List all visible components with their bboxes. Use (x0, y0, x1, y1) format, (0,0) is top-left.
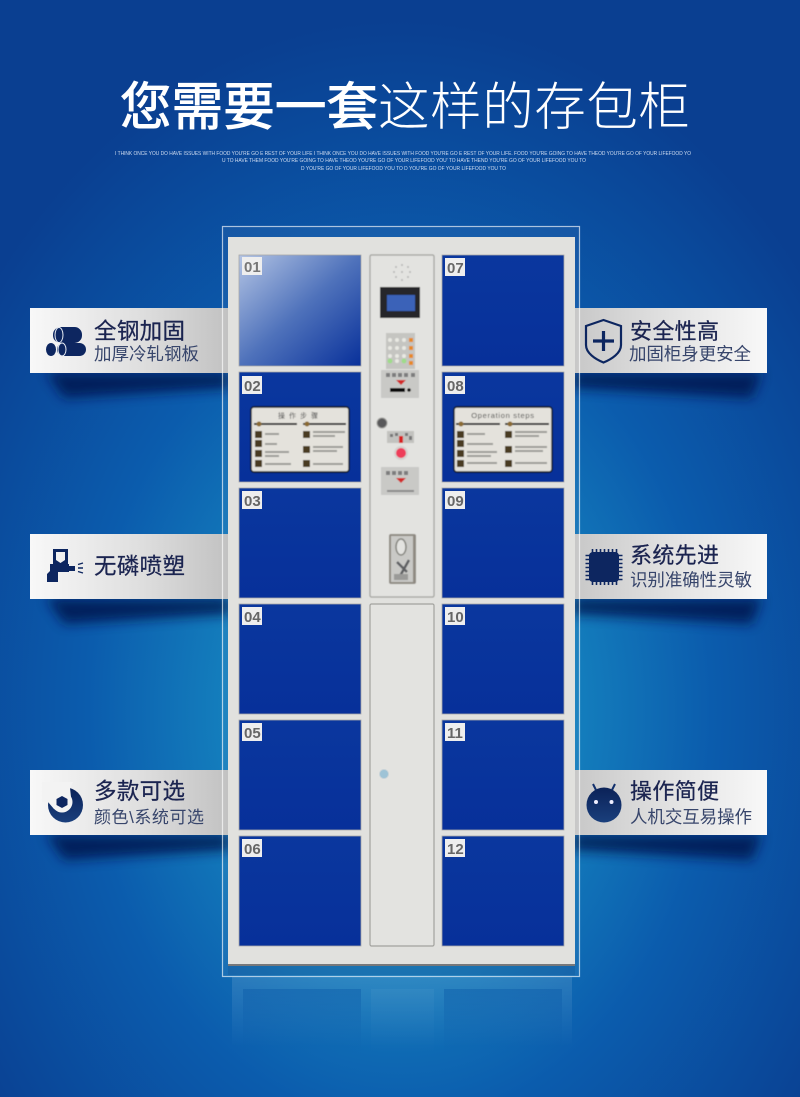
door 04 (239, 604, 361, 714)
callout shadows (46, 372, 762, 860)
indicator panel (387, 431, 414, 443)
door 05 (239, 720, 361, 830)
door 03: 03 (244, 493, 261, 510)
callout: all steel: 全钢加固 (94, 319, 185, 344)
icon: spray gun (47, 549, 83, 582)
callout: phosphorus-free coating: 无磷喷塑 (94, 554, 185, 579)
door 11 (442, 720, 564, 830)
door 07 (442, 255, 564, 366)
receipt panel (381, 467, 419, 495)
door 02 (239, 372, 361, 482)
door 10 (442, 604, 564, 714)
door 08: 08 (447, 378, 464, 395)
callout: all steel: 加厚冷轧钢板 (94, 344, 199, 364)
subtitle fine print: I THINK ONCE YOU DO HAVE ISSUES WITH FOOD YOU'RE GO E REST OF YOUR LIFE I THINK ONCE YOU DO HAVE ISSUES WITH FOOD YOU'RE GO E REST OF YOUR LIFE. FOOD YOU'RE GOING TO HAVE THEOD YOU'RE GO OF YOUR LIFEFOOD YO (115, 151, 691, 157)
subtitle fine print: D YOU'RE GO OF YOUR LIFEFOOD YOU TO D YOU'RE GO OF YOUR LIFEFOOD YOU TO (301, 166, 506, 172)
callout: multiple options (30, 770, 228, 835)
door 12 (442, 836, 564, 946)
door 08 (442, 372, 564, 482)
callout: all steel (30, 308, 228, 373)
callout: high security (575, 308, 767, 373)
cabinet reflection (232, 977, 572, 1054)
callout: easy operation: 操作简便 (630, 779, 719, 804)
instruction card: English (454, 407, 552, 472)
door 05: 05 (244, 725, 261, 742)
speaker holes (393, 264, 411, 281)
icon: chip (586, 549, 622, 585)
icon: wrench crescent (42, 782, 83, 822)
subtitle fine print: U TO HAVE THEM FOOD YOU'RE GOING TO HAVE THEOD YOU'RE GO OF YOUR LIFEFOOD YOU' TO HAVE THEND YOU'RE GO OF YOUR LIFEFOOD YOU TO (222, 158, 586, 164)
door 04: 04 (244, 609, 261, 626)
icon: shield plus (586, 320, 621, 362)
callout: high security: 安全性高 (630, 319, 719, 344)
callout: advanced system: 识别准确性灵敏 (630, 570, 752, 590)
key switch (377, 418, 387, 428)
door 06: 06 (244, 841, 261, 858)
instruction card: Chinese: 操作步骤 (278, 411, 322, 420)
door 10: 10 (447, 609, 464, 626)
icon: android robot (586, 784, 622, 822)
title: 这样的存包柜 (378, 78, 690, 136)
callout: easy operation (575, 770, 767, 835)
glass frame outline (222, 226, 580, 976)
door 03 (239, 488, 361, 598)
callout: multiple options: 多款可选 (94, 779, 185, 804)
instruction card: English: Operation steps (471, 411, 535, 420)
callout: advanced system (575, 534, 767, 599)
touch screen (380, 287, 420, 318)
callout: advanced system: 系统先进 (630, 543, 719, 568)
coin slot (389, 534, 416, 584)
control panel (370, 255, 434, 597)
card reader panel (381, 370, 419, 398)
lower service door (370, 604, 434, 946)
door 02: 02 (244, 378, 261, 395)
subtitle fine print (115, 151, 691, 172)
door 07: 07 (447, 260, 464, 277)
keypad (386, 333, 415, 369)
callout: easy operation: 人机交互易操作 (630, 807, 752, 827)
callout: phosphorus-free coating (30, 534, 228, 599)
icon: steel pipes (46, 327, 86, 356)
door 01: 01 (244, 259, 261, 276)
callout: high security: 加固柜身更安全 (629, 344, 752, 364)
door 01 (239, 255, 361, 366)
door lock (380, 770, 388, 778)
glass frame backing (222, 226, 580, 976)
door 06 (239, 836, 361, 946)
door 09: 09 (447, 493, 464, 510)
door 12: 12 (447, 841, 464, 858)
title (120, 78, 690, 136)
door 09 (442, 488, 564, 598)
red button (394, 446, 408, 460)
instruction card: Chinese (251, 407, 349, 472)
title: 您需要一套 (120, 78, 378, 136)
callout: multiple options: 颜色\系统可选 (94, 808, 204, 827)
locker cabinet (30, 237, 767, 975)
door 11: 11 (447, 725, 463, 742)
